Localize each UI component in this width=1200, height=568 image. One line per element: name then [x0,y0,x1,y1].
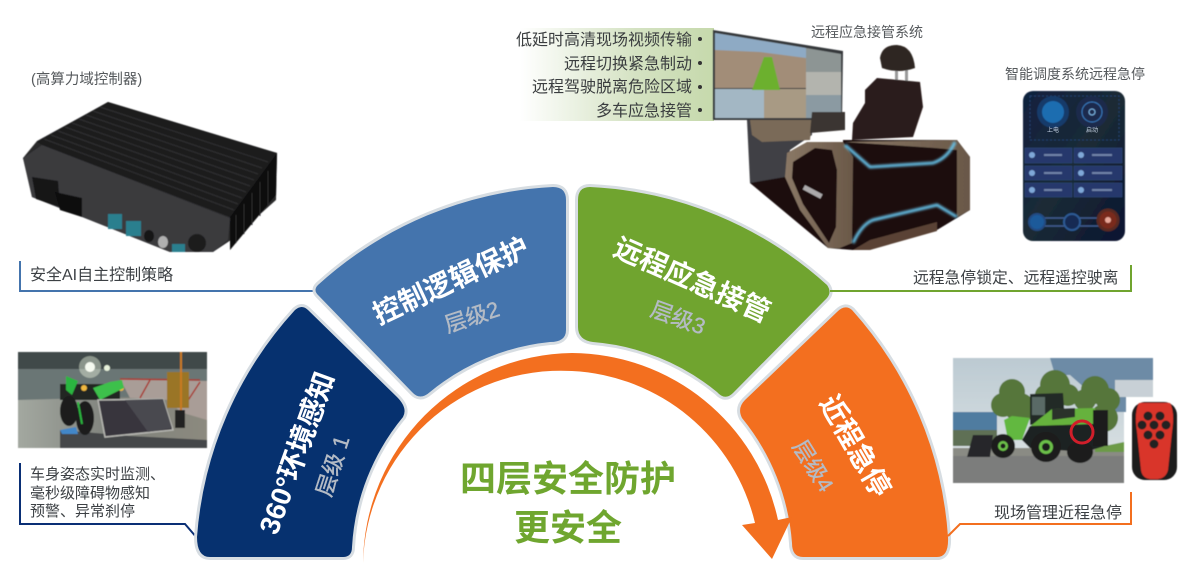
image: dispatch tablet UI [1023,91,1125,241]
dispatch system title: 智能调度系统远程急停 [1005,66,1145,82]
tablet labels: 启动 [1086,126,1098,134]
level 1 label: 层级 1 [311,432,355,500]
feature list band: 远程切换紧急制动 [564,55,692,73]
level 3 title: 远程应急接管 [609,232,775,328]
callout: remote stop lock [830,265,1131,291]
feature list band: 低延时高清现场视频传输 [516,31,692,49]
feature list band: 远程驾驶脱离危险区域 [532,78,692,96]
feature list band: 多车应急接管 [596,101,692,120]
image: remote control cockpit [713,30,970,250]
controller caption: (高算力域控制器) [31,71,142,88]
callout: on-site near-range stop: 现场管理近程急停 [994,504,1122,522]
image: loader in warehouse [18,352,207,448]
tablet labels: 上电 [1047,126,1059,134]
callout: remote stop lock: 远程急停锁定、远程遥控驶离 [913,269,1118,287]
feature list band [516,28,714,121]
console body [747,120,812,190]
level 2 title: 控制逻辑保护 [368,231,534,331]
image: handheld remote [1132,402,1177,480]
callout: safe AI control strategy [20,261,316,291]
arrow: curved orange progress arrow [363,353,792,563]
chair [895,70,898,82]
front bronze frame [785,142,853,248]
panel: level 1 environment perception [197,307,405,557]
level 2 label: 层级2 [441,296,503,338]
callout: safe AI control strategy: 安全AI自主控制策略 [30,266,173,284]
callout: on-site near-range stop [948,492,1131,536]
center heading: 四层安全防护 [460,458,676,499]
cockpit light strips [845,142,957,243]
steering controls [810,112,845,133]
level 4 title: 近程急停 [814,390,896,502]
center heading [460,458,676,548]
panel: level 2 control logic protection [316,187,566,396]
marker: red circle on loader [1071,421,1093,443]
callout: body attitude monitoring: 预警、异常刹停 [30,503,135,520]
remote takeover system title: 远程应急接管系统 [811,24,923,40]
image: high-compute domain controller [23,102,277,252]
callout: body attitude monitoring: 车身姿态实时监测、 [30,466,165,483]
callout: body attitude monitoring [20,463,197,538]
panel: level 4 near-range emergency stop [740,307,948,557]
panel: level 3 remote emergency takeover [578,187,830,397]
center heading: 更安全 [514,507,622,548]
pod body [750,140,970,250]
tablet labels [1047,126,1098,134]
level 4 label: 层级4 [787,436,839,496]
image: wheel loader outdoors [953,358,1153,483]
level 3 label: 层级3 [647,297,709,339]
level 1 title: 360°环境感知 [253,368,341,538]
monitor [713,30,843,120]
callout: body attitude monitoring: 毫秒级障碍物感知 [30,484,150,502]
